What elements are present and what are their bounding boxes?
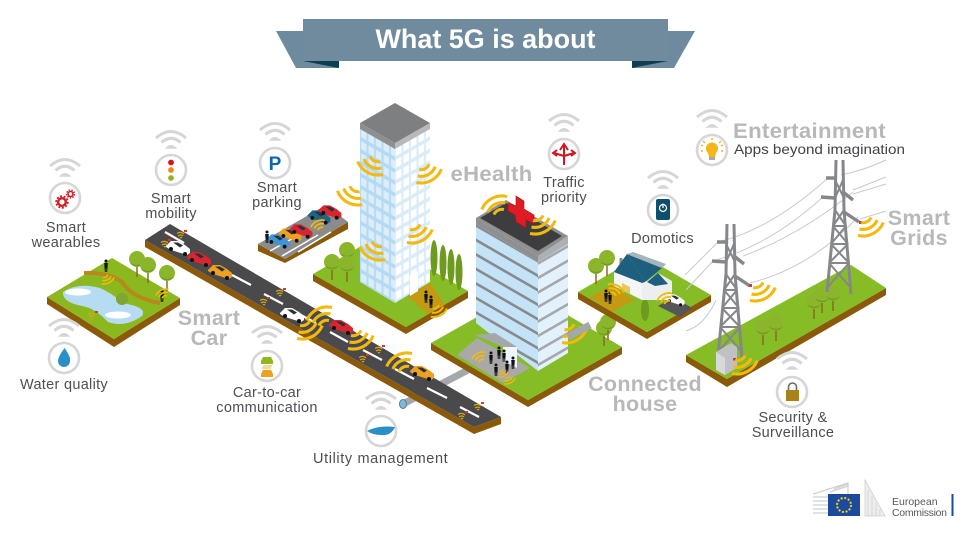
label: smart wearables: wearables — [31, 235, 100, 251]
icon: car-to-car — [252, 326, 282, 381]
panel: office tower plot — [313, 103, 468, 334]
label: security & surveillance: Security & — [758, 410, 828, 426]
label: smart mobility: mobility — [145, 206, 197, 222]
panel: smart parking lot — [258, 205, 348, 263]
title banner: What 5G is about — [376, 24, 596, 54]
icon: smart parking: P — [269, 154, 282, 175]
label: car-to-car: Car-to-car — [233, 385, 301, 401]
panel: road — [145, 224, 501, 434]
icon: water quality — [49, 320, 79, 373]
label: connected house: house — [613, 392, 677, 416]
pylon 1 — [712, 224, 750, 358]
logo: european commission: Commission — [892, 507, 947, 519]
panel: smart grid plot — [685, 160, 886, 387]
icon: entertainment — [697, 110, 727, 165]
label: apps beyond imagination: Apps beyond imagination — [734, 141, 905, 157]
label: smart grids: Grids — [890, 226, 948, 250]
tall office tower — [360, 103, 430, 303]
house — [614, 252, 672, 300]
label: smart wearables: Smart — [46, 220, 86, 236]
panel: water quality park — [47, 251, 180, 347]
logo: european commission: European — [892, 496, 938, 508]
utility pipe — [400, 370, 468, 408]
label: traffic priority: Traffic — [543, 175, 585, 191]
label: smart parking: Smart — [257, 180, 297, 196]
label: domotics: Domotics — [631, 231, 694, 247]
label: ehealth: eHealth — [450, 162, 532, 186]
label: utility management: Utility management — [313, 451, 448, 467]
label: smart grids: Smart — [888, 206, 950, 230]
connecting pipe — [568, 325, 590, 337]
label: smart car: Smart — [178, 306, 240, 330]
hospital building — [475, 200, 568, 371]
icon: smart wearables — [50, 160, 80, 213]
panel: connected house plot — [578, 250, 711, 339]
label: smart mobility: Smart — [151, 191, 191, 207]
icon: domotics — [648, 172, 678, 225]
label: connected house: Connected — [588, 372, 702, 396]
transformer box — [716, 343, 737, 375]
power wires — [685, 160, 886, 331]
label: traffic priority: priority — [541, 190, 587, 206]
icon: utility management — [366, 392, 396, 446]
label: entertainment: Entertainment — [733, 119, 886, 143]
icon: smart mobility — [156, 132, 186, 185]
label: security & surveillance: Surveillance — [752, 425, 834, 441]
red cross — [508, 196, 534, 228]
label: car-to-car: communication — [216, 400, 318, 416]
logo: european commission — [813, 480, 954, 519]
icon: traffic priority — [549, 114, 579, 169]
label: smart parking: parking — [252, 195, 302, 211]
icon: security — [777, 352, 807, 407]
title banner — [276, 19, 695, 68]
label: water quality: Water quality — [20, 377, 108, 393]
pylon 2 — [821, 160, 859, 294]
label: smart car: Car — [191, 326, 228, 350]
panel: hospital plot — [431, 192, 622, 407]
icon: smart parking — [260, 124, 290, 178]
